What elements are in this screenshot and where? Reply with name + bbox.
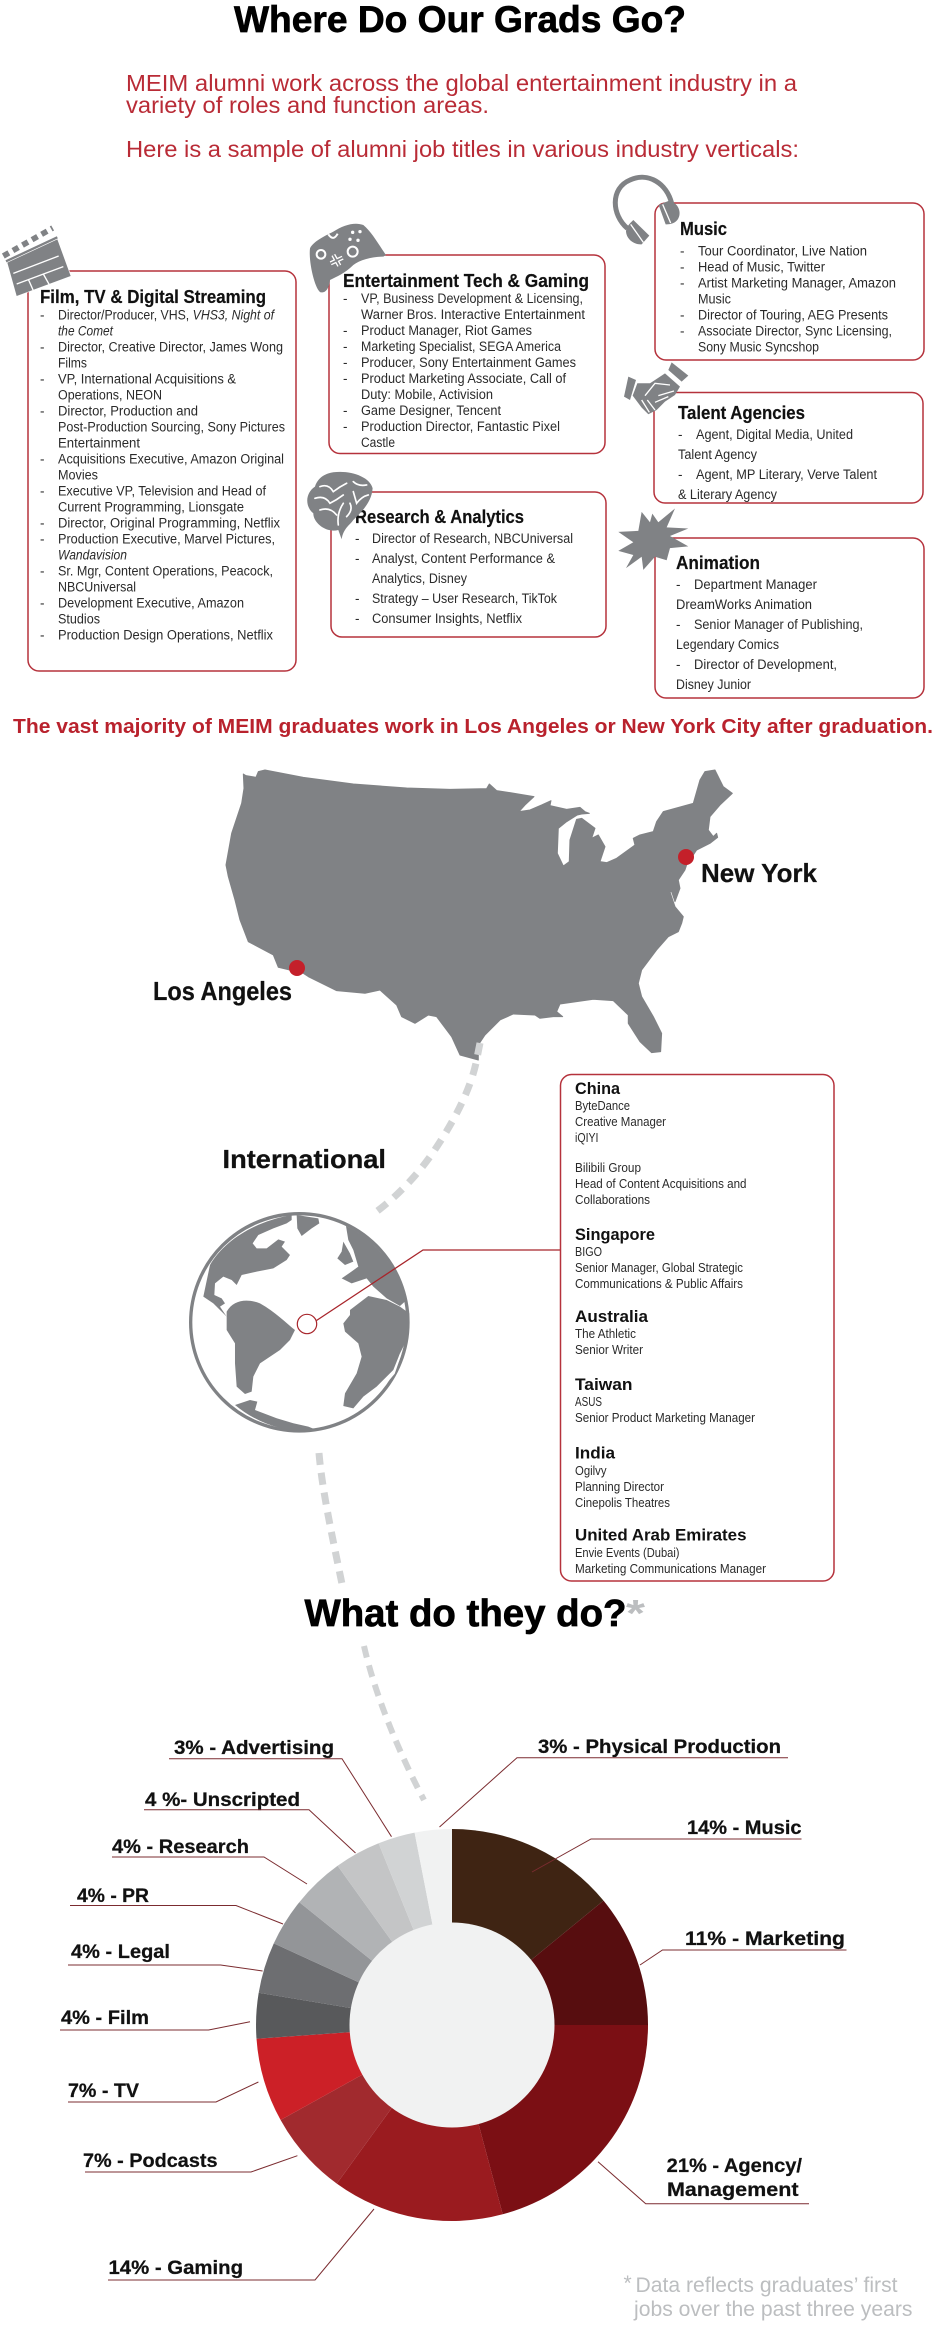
country: China: Collaborations [575, 1193, 650, 1207]
icon: handshake [624, 362, 688, 414]
list: film job titles: Post-Production Sourcing, Sony Pictures [58, 420, 285, 434]
list: research job titles: - [355, 531, 360, 546]
US map [226, 770, 732, 1060]
country: United Arab Emirates: United Arab Emirates [575, 1526, 746, 1544]
list: music job titles: - [680, 260, 684, 274]
panel: talent agencies [654, 392, 923, 503]
footnote: jobs over the past three years [633, 2298, 912, 2321]
panel: film, TV and digital streaming [28, 271, 296, 671]
label: Research [112, 1836, 307, 1884]
heading: entertainment tech: Entertainment Tech & Gaming [343, 271, 589, 291]
label: Agency and Management: Management [667, 2179, 799, 2201]
list: film job titles: - [40, 596, 44, 610]
list: film job titles: - [40, 404, 44, 418]
label: Marketing [640, 1928, 846, 1965]
list: gaming job titles: - [343, 371, 348, 386]
list: film job titles: Development Executive, Amazon [58, 596, 244, 610]
label: Film [60, 2007, 250, 2030]
marker: New York: New York [701, 858, 818, 888]
panel: entertainment tech and gaming [329, 255, 605, 454]
list: gaming job titles: Warner Bros. Interactive Entertainment [361, 307, 585, 322]
list: talent job titles: & Literary Agency [678, 487, 777, 502]
list: animation job titles: - [676, 577, 680, 592]
callout line: globe to box [297, 1250, 560, 1334]
intro text: MEIM alumni work across the global entertainment industry in a [126, 70, 797, 96]
country: Australia: Australia [575, 1307, 649, 1326]
list: talent job titles: Agent, Digital Media, United [696, 427, 853, 442]
country: China: Head of Content Acquisitions and [575, 1177, 747, 1191]
label: TV [68, 2080, 258, 2102]
list: animation job titles: - [676, 657, 680, 672]
label: Physical Production [440, 1736, 788, 1827]
list: gaming job titles: VP, Business Development & Licensing, [361, 291, 583, 306]
list: film job titles: Current Programming, Lionsgate [58, 500, 244, 514]
list: music job titles: - [680, 244, 684, 258]
list: gaming job titles: - [343, 339, 348, 354]
country: Singapore: Singapore [575, 1225, 655, 1244]
footnote [624, 2272, 912, 2321]
label: Agency and Management [598, 2155, 809, 2204]
list: research job titles: - [355, 551, 360, 566]
heading: research: Research & Analytics [355, 507, 524, 527]
list: talent job titles: - [678, 427, 682, 442]
country: India: Cinepolis Theatres [575, 1496, 670, 1510]
list: research job titles: Analytics, Disney [372, 571, 467, 586]
list: film job titles: Sr. Mgr, Content Operations, Peacock, [58, 564, 273, 578]
list: film job titles: - [40, 308, 44, 322]
list: music job titles: Music [698, 292, 731, 306]
panel: animation [655, 538, 924, 698]
list: film job titles: - [40, 372, 44, 386]
country: Singapore: Senior Manager, Global Strategic [575, 1261, 743, 1275]
list: talent job titles: Talent Agency [678, 447, 757, 462]
list: gaming job titles: - [343, 355, 348, 370]
panel: research and analytics [331, 492, 606, 637]
list: music job titles: Director of Touring, AEG Presents [698, 308, 888, 322]
list: animation job titles: Disney Junior [676, 677, 751, 692]
list: music job titles: Tour Coordinator, Live Nation [698, 244, 867, 258]
list: gaming job titles: Product Manager, Riot Games [361, 323, 532, 338]
country: Australia: Senior Writer [575, 1343, 643, 1357]
label: Podcasts: 7% - Podcasts [83, 2150, 218, 2172]
list: film job titles: Operations, NEON [58, 388, 162, 402]
list: music job titles: Artist Marketing Manager, Amazon [698, 276, 896, 290]
label: PR: 4% - PR [77, 1885, 149, 1907]
country: Australia: The Athletic [575, 1327, 636, 1341]
donut chart [256, 1829, 648, 2221]
label: Film: 4% - Film [61, 2007, 149, 2029]
country: China: iQIYI [575, 1131, 598, 1145]
list: gaming job titles: Marketing Specialist, SEGA America [361, 339, 561, 354]
list: film job titles: - [40, 484, 44, 498]
country: Singapore [575, 1225, 743, 1291]
list: film job titles: - [40, 564, 44, 578]
intro text [126, 70, 799, 162]
label: Research: 4% - Research [112, 1836, 249, 1858]
country: India: India [575, 1444, 616, 1462]
list: film job titles: Director, Production and [58, 404, 198, 418]
list: film job titles: - [40, 340, 44, 354]
label: Unscripted: 4 %- Unscripted [145, 1789, 300, 1811]
footnote: Data reflects graduates’ first [636, 2274, 898, 2297]
label: Music [532, 1817, 802, 1872]
country: Australia [575, 1307, 649, 1357]
list: music job titles: - [680, 324, 684, 338]
label: PR [70, 1885, 283, 1924]
heading: film: Film, TV & Digital Streaming [40, 287, 266, 307]
intro text: Here is a sample of alumni job titles in various industry verticals: [126, 136, 799, 162]
list: animation job titles: Senior Manager of Publishing, [694, 617, 863, 632]
icon: globe [191, 1214, 409, 1431]
country: Singapore: BIGO [575, 1245, 602, 1259]
title: Where Do Our Grads Go? [234, 0, 686, 40]
list: film job titles: the Comet [58, 324, 114, 338]
list: talent job titles: - [678, 467, 682, 482]
label: TV: 7% - TV [68, 2080, 139, 2102]
heading: What do they do: * [626, 1593, 645, 1635]
list: film job titles: Production Design Operations, Netflix [58, 628, 273, 642]
list: animation job titles: Legendary Comics [676, 637, 779, 652]
list: film job titles: - [40, 516, 44, 530]
list: music job titles: Head of Music, Twitter [698, 260, 825, 274]
list: gaming job titles: - [343, 419, 348, 434]
list: gaming job titles: - [343, 323, 348, 338]
icon: brain [307, 472, 373, 539]
list: music job titles: - [680, 308, 684, 322]
list: film job titles: Films [58, 356, 87, 370]
heading: What do they do: What do they do? [304, 1593, 626, 1635]
list: film job titles: Movies [58, 468, 98, 482]
country: India: Planning Director [575, 1480, 664, 1494]
list: film job titles: Acquisitions Executive, Amazon Original [58, 452, 284, 466]
list: film job titles: Studios [58, 612, 100, 626]
icon: starburst [618, 508, 688, 570]
list: film job titles: - [40, 452, 44, 466]
list: film job titles: Director, Creative Director, James Wong [58, 340, 283, 354]
label: Gaming [108, 2209, 374, 2280]
label: Physical Production: 3% - Physical Production [538, 1736, 781, 1758]
list: research job titles: Director of Research, NBCUniversal [372, 531, 573, 546]
country: Taiwan [575, 1375, 755, 1425]
list: film job titles: NBCUniversal [58, 580, 136, 594]
list: research job titles: - [355, 591, 360, 606]
headline: LA and NYC: The vast majority of MEIM graduates work in Los Angeles or New York City after graduation. [13, 716, 933, 738]
country: China [575, 1079, 747, 1207]
list: film job titles: Director/Producer, VHS, VHS3, Night of [58, 308, 275, 322]
list: animation job titles: - [676, 617, 680, 632]
label: Advertising [169, 1737, 392, 1837]
list: talent job titles: Agent, MP Literary, Verve Talent [696, 467, 877, 482]
list: music job titles [680, 244, 896, 354]
list: film job titles: Wandavision [58, 548, 127, 562]
panel: music [655, 203, 924, 360]
list: film job titles: Entertainment [58, 436, 140, 450]
list: film job titles: Production Executive, Marvel Pictures, [58, 532, 275, 546]
list: gaming job titles: Game Designer, Tencent [361, 403, 501, 418]
country: Taiwan: ASUS [575, 1395, 602, 1409]
dashed route: US to globe [376, 1043, 480, 1212]
icon: game controller [310, 224, 386, 292]
list: research job titles: Consumer Insights, Netflix [372, 611, 522, 626]
list: talent job titles [678, 427, 877, 502]
list: research job titles: Strategy – User Research, TikTok [372, 591, 557, 606]
list: music job titles: Associate Director, Sync Licensing, [698, 324, 892, 338]
footnote: * [624, 2272, 632, 2295]
list: film job titles [40, 308, 285, 642]
list: research job titles: - [355, 611, 360, 626]
list: gaming job titles: Duty: Mobile, Activision [361, 387, 493, 402]
label: Legal: 4% - Legal [71, 1941, 170, 1963]
heading: talent agencies: Talent Agencies [678, 403, 805, 423]
country: Taiwan: Taiwan [575, 1375, 632, 1394]
list: music job titles: Sony Music Syncshop [698, 340, 819, 354]
heading: music: Music [680, 219, 727, 239]
dashed route: heading to donut [364, 1646, 424, 1800]
list: gaming job titles [343, 291, 585, 450]
dashed route: globe to heading [319, 1453, 342, 1584]
country: India: Ogilvy [575, 1464, 607, 1478]
country: China: Bilibili Group [575, 1161, 641, 1175]
country: Singapore: Communications & Public Affairs [575, 1277, 743, 1291]
label: Unscripted [144, 1789, 356, 1853]
list: gaming job titles: Castle [361, 435, 395, 450]
list: animation job titles: Department Manager [694, 577, 817, 592]
label: Legal [68, 1941, 263, 1971]
list: gaming job titles: Producer, Sony Entertainment Games [361, 355, 576, 370]
intro text: variety of roles and function areas. [126, 92, 489, 118]
list: gaming job titles: - [343, 403, 348, 418]
marker: Los Angeles: Los Angeles [153, 976, 292, 1006]
heading: animation: Animation [676, 553, 760, 573]
list: film job titles: - [40, 532, 44, 546]
list: research job titles [355, 531, 573, 626]
list: gaming job titles: Product Marketing Associate, Call of [361, 371, 566, 386]
panel: international job titles [560, 1074, 834, 1581]
heading: International: International [222, 1144, 386, 1174]
country: China: Creative Manager [575, 1115, 666, 1129]
country: India [575, 1444, 670, 1510]
icon: headphones [615, 177, 680, 244]
list: film job titles: VP, International Acquisitions & [58, 372, 236, 386]
list: research job titles: Analyst, Content Performance & [372, 551, 555, 566]
country: United Arab Emirates [575, 1526, 766, 1576]
icon: clapperboard [3, 228, 71, 297]
list: film job titles: Executive VP, Television and Head of [58, 484, 266, 498]
list: film job titles: - [40, 628, 44, 642]
list: film job titles: Director, Original Programming, Netflix [58, 516, 280, 530]
label: Gaming: 14% - Gaming [108, 2257, 243, 2279]
list: gaming job titles: - [343, 291, 348, 306]
label: Podcasts [83, 2150, 297, 2172]
list: animation job titles: Director of Development, [694, 657, 837, 672]
country: China: ByteDance [575, 1099, 630, 1113]
list: animation job titles [676, 577, 863, 692]
country: United Arab Emirates: Marketing Communications Manager [575, 1562, 766, 1576]
label: Agency and Management: 21% - Agency/ [667, 2155, 803, 2177]
country: Taiwan: Senior Product Marketing Manager [575, 1411, 755, 1425]
list: animation job titles: DreamWorks Animation [676, 597, 812, 612]
list: gaming job titles: Production Director, Fantastic Pixel [361, 419, 560, 434]
label: Music: 14% - Music [687, 1817, 802, 1839]
label: Marketing: 11% - Marketing [685, 1928, 845, 1950]
marker: Los Angeles [153, 960, 305, 1006]
label: Advertising: 3% - Advertising [174, 1737, 334, 1759]
country: China: China [575, 1079, 621, 1098]
country: United Arab Emirates: Envie Events (Dubai) [575, 1546, 680, 1560]
list: music job titles: - [680, 276, 684, 290]
marker: New York [678, 849, 818, 888]
